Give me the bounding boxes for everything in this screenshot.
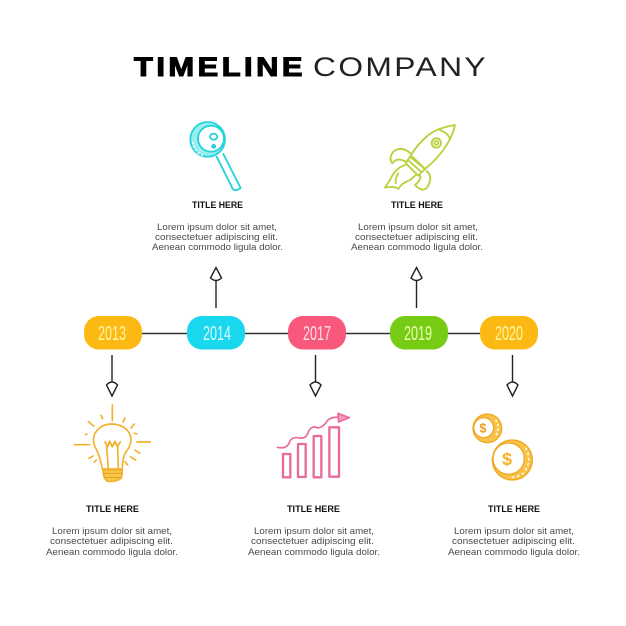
arrow: 2019 up [411, 268, 422, 308]
arrow: 2014 up [210, 268, 222, 308]
text block: 2019: Lorem ipsum dolor sit amet, [358, 222, 478, 232]
pill: 2013: 2013 [98, 323, 126, 345]
arrow: 2020 down [507, 355, 518, 396]
icon: rocket [385, 125, 455, 190]
text block: 2017 [248, 504, 380, 557]
pill: 2020 [480, 316, 538, 350]
text block: 2017: Lorem ipsum dolor sit amet, [254, 526, 374, 536]
pill: 2017: 2017 [303, 323, 331, 345]
text block: 2019 [351, 200, 483, 252]
text block: 2013: consectetuer adipiscing elit. [50, 536, 173, 546]
text block: 2020 [448, 504, 580, 557]
text block: 2014: Lorem ipsum dolor sit amet, [157, 222, 277, 232]
pill: 2019: 2019 [404, 323, 432, 345]
arrow: 2017 down [310, 355, 321, 396]
title [134, 52, 488, 82]
text block: 2019: Aenean commodo ligula dolor. [351, 242, 483, 252]
text block: 2020: consectetuer adipiscing elit. [452, 536, 575, 546]
pill: 2019 [390, 316, 448, 350]
text block: 2017: TITLE HERE [287, 504, 340, 514]
text block: 2014: Aenean commodo ligula dolor. [152, 242, 283, 252]
arrow: 2013 down [106, 355, 118, 396]
text block: 2019: TITLE HERE [391, 200, 443, 210]
text block: 2020: Lorem ipsum dolor sit amet, [454, 526, 574, 536]
icon: magnifier [190, 122, 241, 190]
text block: 2014 [152, 200, 283, 252]
icon: coins [473, 414, 532, 480]
text block: 2020: Aenean commodo ligula dolor. [448, 547, 580, 557]
text block: 2019: consectetuer adipiscing elit. [355, 232, 478, 242]
pill: 2014 [187, 316, 245, 350]
text block: 2013: Lorem ipsum dolor sit amet, [52, 526, 172, 536]
icon: coins: $ [479, 421, 486, 435]
text block: 2014: TITLE HERE [192, 200, 243, 210]
text block: 2014: consectetuer adipiscing elit. [155, 232, 278, 242]
pill: 2014: 2014 [203, 323, 231, 345]
pill: 2020: 2020 [495, 323, 523, 345]
title: TIMELINE [134, 52, 306, 82]
icon: coins: $ [502, 449, 512, 469]
text block: 2017: consectetuer adipiscing elit. [251, 536, 374, 546]
timeline line [140, 332, 485, 334]
icon: light bulb [74, 405, 150, 481]
title: COMPANY [313, 52, 488, 82]
text block: 2013: Aenean commodo ligula dolor. [46, 547, 178, 557]
text block: 2013 [46, 504, 178, 557]
text block: 2013: TITLE HERE [86, 504, 139, 514]
pill: 2013 [84, 316, 142, 350]
text block: 2020: TITLE HERE [488, 504, 540, 514]
icon: bar chart [277, 413, 349, 477]
text block: 2017: Aenean commodo ligula dolor. [248, 547, 380, 557]
pill: 2017 [288, 316, 346, 350]
